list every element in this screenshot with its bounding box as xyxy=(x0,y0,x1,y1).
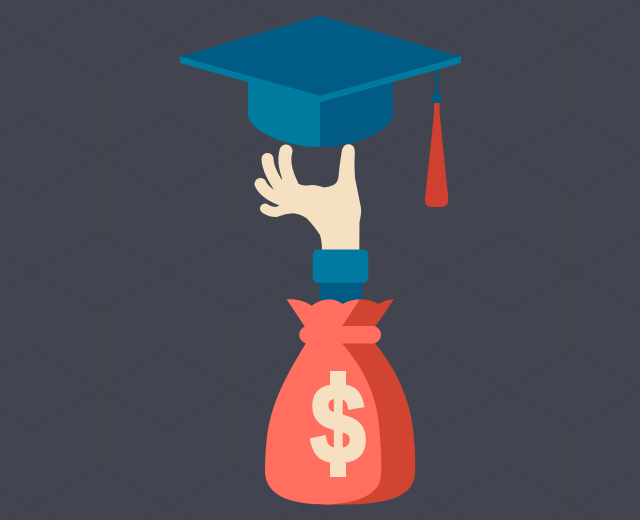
cap board edge xyxy=(180,56,461,102)
icon: tassel xyxy=(425,68,448,207)
icon: hand xyxy=(260,144,361,250)
cap crown, lit side xyxy=(248,78,320,147)
cap board top xyxy=(180,16,461,96)
icon: graduation cap xyxy=(180,16,461,147)
cap crown, shaded side xyxy=(320,78,393,147)
bag neck ruffle, shaded xyxy=(342,299,394,327)
icon: sleeve xyxy=(319,280,362,306)
bag neck ruffle, light xyxy=(287,299,360,327)
icon: money bag xyxy=(265,299,415,505)
bag body shaded side xyxy=(325,343,415,505)
dollar sign: $ xyxy=(311,362,365,486)
bag body light side xyxy=(265,343,381,504)
bag tie band xyxy=(299,326,381,344)
icon: cuff xyxy=(313,250,368,283)
